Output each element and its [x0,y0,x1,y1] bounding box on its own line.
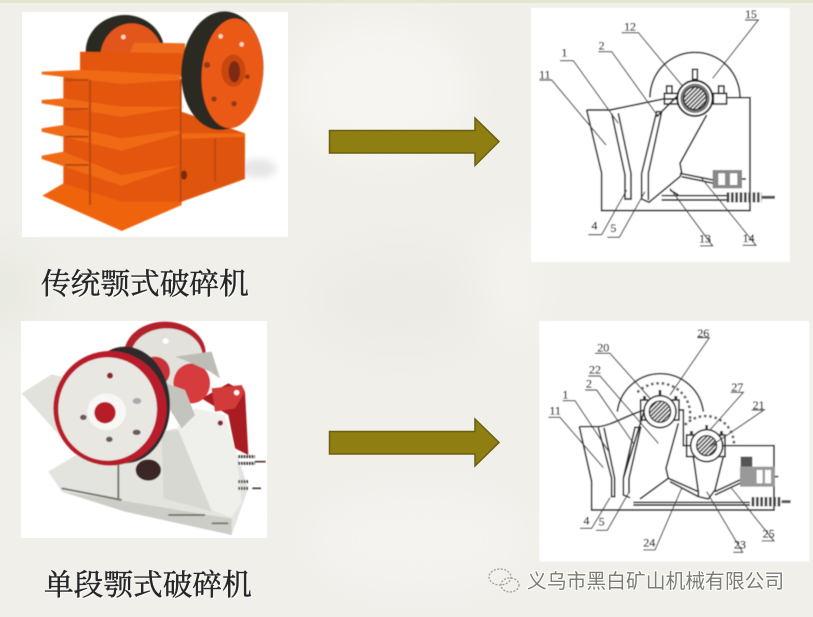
watermark text: 义乌市黑白矿山机械有限公司 [527,571,784,593]
diagram: single-stage crusher structure: 27 [731,380,743,394]
title: single-stage jaw crusher: 单段颚式破碎机 [44,569,252,602]
title: traditional jaw crusher: 传统颚式破碎机 [41,268,249,301]
diagram: traditional crusher structure: 12 [624,20,636,34]
diagram: traditional crusher structure [531,7,790,262]
diagram: single-stage crusher structure: 2 [586,377,592,391]
diagram: single-stage crusher structure: 22 [589,363,601,377]
diagram: traditional crusher structure: 4 [591,218,597,232]
diagram: traditional crusher structure: 14 [743,231,755,245]
diagram: single-stage crusher structure: 1 [562,387,568,401]
diagram: traditional crusher structure: 1 [561,46,567,60]
diagram: single-stage crusher structure: 23 [734,537,746,551]
diagram: traditional crusher structure: 15 [745,7,757,21]
arrow: bottom [330,419,499,466]
diagram: single-stage crusher structure: 24 [643,536,655,550]
photo: traditional jaw crusher [22,9,288,237]
diagram: single-stage crusher structure: 5 [599,515,605,529]
diagram: traditional crusher structure: 5 [610,221,616,235]
diagram: single-stage crusher structure: 25 [763,527,775,541]
diagram: traditional crusher structure: 2 [599,38,605,52]
icon: wechat watermark [489,569,519,592]
diagram: single-stage crusher structure: 20 [597,341,609,355]
diagram: single-stage crusher structure: 4 [583,513,589,527]
diagram: single-stage crusher structure: 21 [753,398,765,412]
diagram: traditional crusher structure: 11 [539,67,551,81]
diagram: single-stage crusher structure: 26 [697,326,709,340]
diagram: single-stage crusher structure: 11 [549,403,561,417]
diagram: traditional crusher structure: 13 [699,232,711,246]
diagram: single-stage crusher structure [539,321,809,562]
arrow: top [330,118,499,166]
photo: single-stage jaw crusher [21,321,267,538]
